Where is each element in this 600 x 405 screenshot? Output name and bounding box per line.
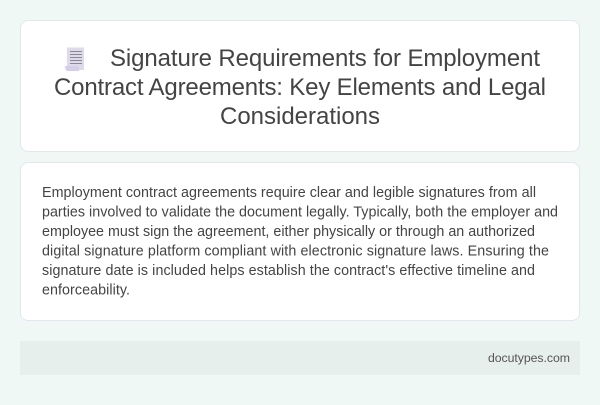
footer bar	[20, 341, 580, 375]
panel: title card	[20, 20, 580, 152]
title line 1: Signature Requirements for Employment	[110, 45, 540, 72]
body line 4: digital signature platform compliant with electronic signature laws. Ensuring the	[42, 244, 549, 260]
title line 3: Considerations	[220, 103, 380, 130]
icon: document scroll	[65, 48, 84, 71]
body line 5: signature date is included helps establish the contract's effective timeline and	[42, 263, 535, 279]
body line 6: enforceability.	[42, 282, 130, 298]
footer text: docutypes.com	[488, 351, 570, 365]
title line 2: Contract Agreements: Key Elements and Legal	[54, 74, 546, 101]
body line 3: employee must sign the agreement, either physically or through an authorized	[42, 224, 535, 240]
body line 1: Employment contract agreements require clear and legible signatures from all	[42, 185, 536, 201]
body line 2: parties involved to validate the document legally. Typically, both the employer and	[42, 204, 558, 220]
panel: description card	[20, 162, 580, 321]
